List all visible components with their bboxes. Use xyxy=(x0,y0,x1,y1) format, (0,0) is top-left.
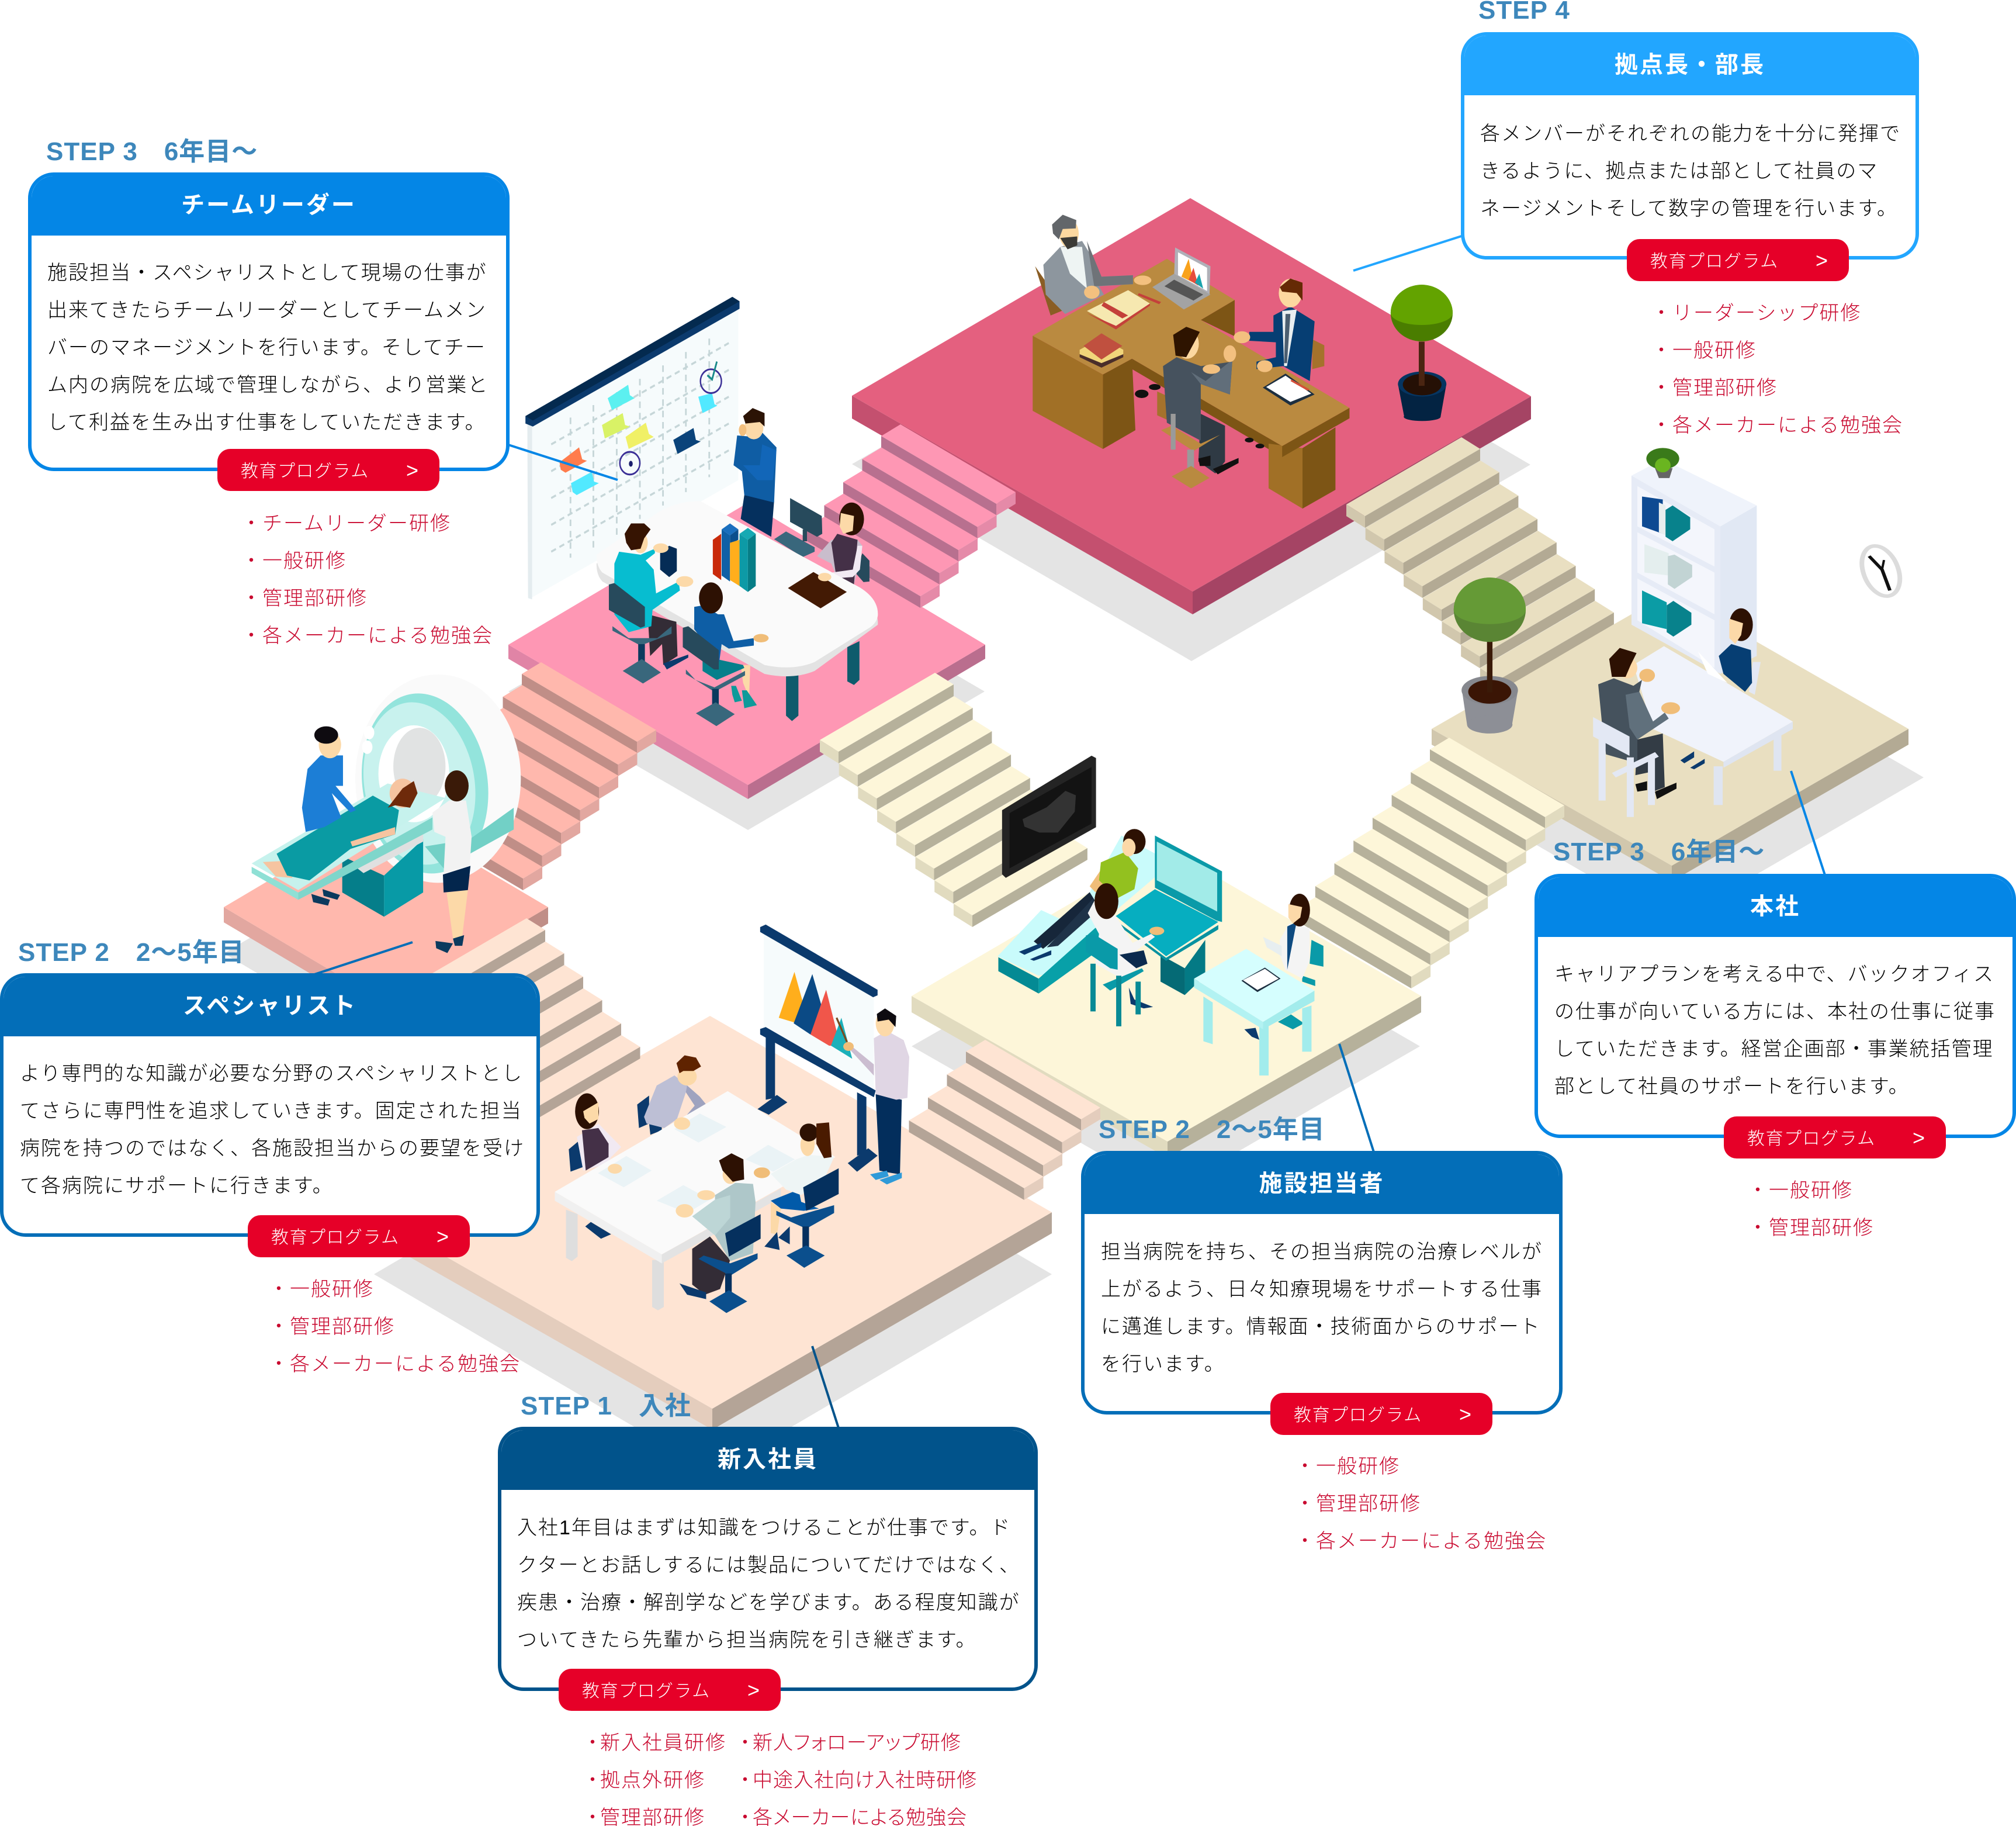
interview table xyxy=(1633,646,1793,805)
connector: new hire xyxy=(812,1346,839,1428)
clipboard xyxy=(1263,374,1315,406)
card: new employee xyxy=(498,1427,1038,1691)
description: キャリアプランを考える中で、バックオフィス の仕事が向いている方には、本社の仕事に従事 していただきます。経営企画部・事業統括管理 部として社員のサポートを行います。 xyxy=(1554,963,1996,1098)
woman in blue xyxy=(683,582,768,726)
scene: team meeting with planning board xyxy=(525,297,878,726)
scene: head office interview xyxy=(1454,448,1906,817)
card: branch manager xyxy=(1461,32,1919,260)
conference table xyxy=(597,501,878,721)
doctor at desk xyxy=(1245,894,1324,1040)
scene: MRI scanner xyxy=(252,666,521,953)
scene: presenter with chart board xyxy=(757,925,909,1184)
button: education program: 教育プログラム xyxy=(1747,1129,1876,1149)
training list: ・一般研修 ・管理部研修 xyxy=(1748,1180,1874,1239)
card: head office xyxy=(1534,874,2016,1138)
laptop xyxy=(1152,247,1210,310)
description: 施設担当・スペシャリストとして現場の仕事が 出来てきたらチームリーダーとしてチームメン バーのマネージメントを行います。そしてチー ム内の病院を広域で管理しながら、より営業と して利益を生み出す仕事をしていただきます。 xyxy=(47,262,489,434)
training list: ・一般研修 ・管理部研修 ・各メーカーによる勉強会 xyxy=(1295,1455,1547,1552)
doctor xyxy=(432,770,472,953)
book stack xyxy=(1080,333,1123,368)
panel: step 3 head office xyxy=(1534,838,2016,1239)
presenter xyxy=(843,1008,909,1184)
patient xyxy=(1019,829,1145,961)
folder xyxy=(788,572,847,608)
right chairs behind table xyxy=(774,498,870,582)
floor: step 3 pink xyxy=(508,503,985,799)
panel: step 2 specialist xyxy=(0,938,540,1375)
man in navy suit xyxy=(1234,278,1324,381)
button: education program: > xyxy=(1459,1402,1471,1426)
bookshelf xyxy=(1631,448,1757,674)
connector: team leader xyxy=(508,445,618,480)
planning board xyxy=(525,297,740,600)
connector: specialist xyxy=(314,942,413,974)
heading label: step 1: STEP 1 入社 xyxy=(521,1392,691,1420)
button: education program: 教育プログラム xyxy=(1294,1406,1422,1425)
stairs: pink to red xyxy=(805,424,1016,608)
training list: ・チームリーダー研修 ・一般研修 ・管理部研修 ・各メーカーによる勉強会 xyxy=(241,513,493,647)
panel: step 1 new employee xyxy=(498,1392,1038,1826)
card: team leader: チームリーダー xyxy=(181,192,356,218)
man in dark suit with chair xyxy=(1157,327,1239,489)
floor: step 3 beige xyxy=(1432,592,1908,881)
nurse xyxy=(302,727,356,905)
bar chart model xyxy=(713,523,756,592)
floor: step 2 salmon xyxy=(224,811,548,1018)
connector: facility xyxy=(1339,1044,1374,1152)
floor shadows xyxy=(224,267,1924,1473)
description: 各メンバーがそれぞれの能力を十分に発揮で きるように、拠点または部として社員のマ ネージメントそして数字の管理を行います。 xyxy=(1480,123,1901,220)
card: branch manager: 拠点長・部長 xyxy=(1615,52,1765,78)
lilac man xyxy=(637,1055,706,1135)
white table xyxy=(555,1091,836,1310)
connector: head office xyxy=(1791,771,1825,875)
navy box xyxy=(660,546,677,577)
description: 入社1年目はまずは知識をつけることが仕事です。ド クターとお話しするには製品についてだけではなく、 疾患・治療・解剖学などを学びます。ある程度知識が ついてきたら先輩から担当病院を引き継ぎます。 xyxy=(517,1517,1020,1651)
heading label: step 3: STEP 3 6年目〜 xyxy=(1553,838,1765,866)
open book xyxy=(1087,290,1161,330)
man in teal sweater xyxy=(609,523,693,683)
button: education program xyxy=(248,1215,470,1257)
desk xyxy=(1194,949,1314,1075)
heading label: step 3: STEP 3 6年目〜 xyxy=(46,137,258,166)
floor: step 1 peach xyxy=(368,1016,1052,1430)
patient xyxy=(263,779,418,880)
potted tree xyxy=(1454,577,1526,734)
button: education program xyxy=(217,449,439,491)
exam bed and console xyxy=(997,836,1222,995)
stairs: peach to salmon xyxy=(411,918,640,1126)
standing man xyxy=(733,408,777,537)
potted tree xyxy=(1391,285,1453,421)
card: specialist: スペシャリスト xyxy=(183,993,357,1019)
scene: ultrasound exam room xyxy=(997,756,1324,1075)
card: team leader xyxy=(28,172,510,471)
button: education program: > xyxy=(1913,1126,1925,1150)
card: facility representative xyxy=(1081,1151,1563,1415)
man in pale sweater xyxy=(676,1153,761,1313)
button: education program xyxy=(559,1669,781,1711)
button: education program: 教育プログラム xyxy=(271,1228,400,1247)
panel: step 3 team leader xyxy=(28,137,510,647)
woman with ponytail xyxy=(754,1122,839,1268)
card: head office: 本社 xyxy=(1750,894,1800,919)
heading label: step 2: STEP 2 2〜5年目 xyxy=(1099,1115,1325,1144)
floor: step 2 cream xyxy=(912,848,1421,1158)
scan table xyxy=(252,783,445,917)
man in grey jacket xyxy=(1043,215,1151,314)
panel: step 2 facility representative xyxy=(1081,1115,1563,1552)
description: より専門的な知識が必要な分野のスペシャリストとし てさらに専門性を追求していきます。固定された担当 病院を持つのではなく、各施設担当からの要望を受け て各病院にサポートに行きます。 xyxy=(20,1063,525,1197)
seated woman with vest xyxy=(817,503,864,585)
card: facility representative: 施設担当者 xyxy=(1259,1171,1385,1196)
button: education program: > xyxy=(406,458,418,482)
card: specialist xyxy=(0,973,540,1237)
button: education program: > xyxy=(437,1225,449,1249)
stairs: beige to red xyxy=(1346,437,1614,691)
man seated xyxy=(1593,648,1680,817)
button: education program xyxy=(1627,239,1849,281)
panel: step 4 branch manager xyxy=(1461,0,1919,437)
scene: manager meeting at wooden desk xyxy=(1033,215,1453,509)
card: new employee: 新入社員 xyxy=(718,1447,818,1472)
hand on folder xyxy=(818,573,832,581)
stairs: salmon to pink xyxy=(408,662,656,890)
training list: ・一般研修 ・管理部研修 ・各メーカーによる勉強会 xyxy=(269,1278,521,1375)
button: education program: 教育プログラム xyxy=(582,1682,711,1701)
scene: new hires at table xyxy=(555,1055,839,1313)
stairs: cream to beige xyxy=(1296,738,1564,988)
button: education program xyxy=(1270,1393,1492,1435)
button: education program: 教育プログラム xyxy=(241,462,369,481)
button: education program: 教育プログラム xyxy=(1650,252,1779,271)
heading label: step 2: STEP 2 2〜5年目 xyxy=(18,938,245,967)
button: education program: > xyxy=(1816,248,1828,272)
connector: step 4 xyxy=(1353,236,1463,271)
woman seated xyxy=(1681,608,1761,769)
button: education program xyxy=(1724,1116,1946,1158)
description: 担当病院を持ち、その担当病院の治療レベルが 上がるよう、日々知療現場をサポートする仕事 に邁進します。情報面・技術面からのサポート を行います。 xyxy=(1101,1241,1543,1375)
stairs: cream to pink xyxy=(820,673,1087,927)
left woman xyxy=(569,1094,621,1171)
wall clock xyxy=(1856,543,1906,599)
training list: ・リーダーシップ研修 ・一般研修 ・管理部研修 ・各メーカーによる勉強会 xyxy=(1651,302,1903,437)
button: education program: > xyxy=(747,1678,760,1702)
seated sonographer xyxy=(1086,883,1164,1026)
floor: step 4 red xyxy=(852,198,1531,614)
scanner xyxy=(340,666,521,901)
stairs: peach to cream xyxy=(909,1040,1100,1200)
wall monitor xyxy=(1002,756,1096,878)
hands xyxy=(608,1117,690,1174)
